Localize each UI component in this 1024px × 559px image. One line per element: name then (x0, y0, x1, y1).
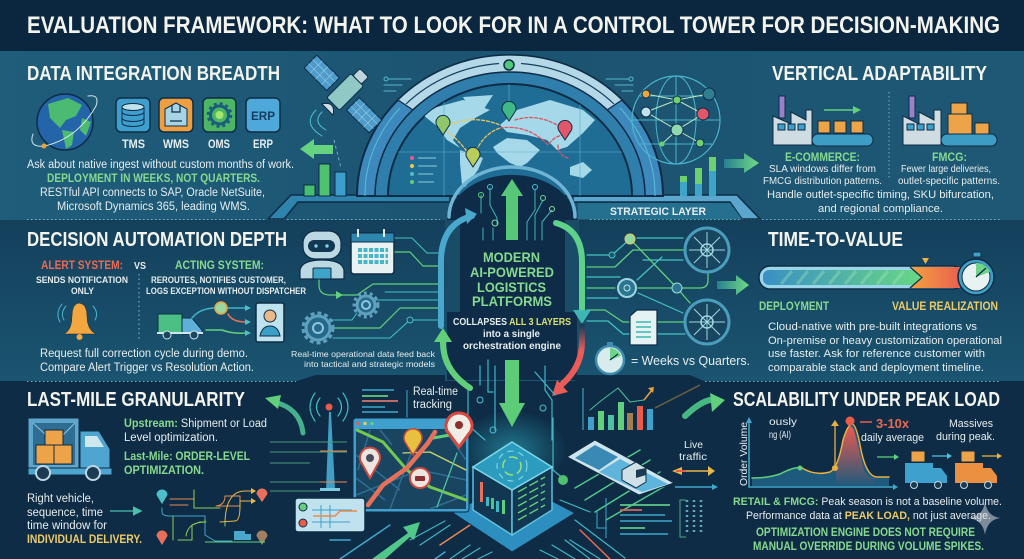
icon: network globe (606, 76, 720, 164)
strategic layer label: STRATEGIC LAYER (610, 206, 706, 218)
dome ring (357, 55, 663, 196)
peak label: daily average (861, 432, 924, 444)
heading: LAST-MILE GRANULARITY (27, 389, 246, 411)
dome top node (504, 60, 514, 70)
feedback note: Real-time operational data feed back (291, 349, 436, 359)
individual delivery text (27, 493, 142, 546)
body text: On-premise or heavy customization operational (768, 335, 1002, 347)
e-commerce text: SLA windows differ from (769, 164, 876, 175)
alert vs acting labels (41, 258, 264, 272)
alert vs acting labels: ACTING SYSTEM: (175, 258, 264, 272)
circuit lines left (319, 238, 438, 338)
individual delivery text: time window for (27, 520, 107, 532)
panel: data integration breadth (27, 63, 294, 213)
retail text: Performance data at PEAK LOAD, not just average. (746, 510, 991, 522)
icon: ERP: ERP (251, 109, 275, 123)
clipped annotation: ously (769, 416, 798, 428)
cube top face (473, 442, 552, 490)
central dome: strategic layer (268, 55, 760, 219)
arrow: green feedback up (434, 328, 470, 388)
FMCG text: Fewer large deliveries, (901, 164, 991, 175)
e-commerce text: E-COMMERCE: (785, 152, 860, 164)
map pins (360, 413, 472, 488)
icon: delivery truck and routes (157, 302, 251, 339)
live traffic label: traffic (679, 451, 707, 463)
map pins (436, 115, 450, 135)
capsule heading: PLATFORMS (472, 293, 552, 309)
body text: Ask about native ingest without custom months of work. (27, 159, 294, 171)
dome legend (410, 156, 414, 160)
feedback note (291, 349, 436, 369)
body text: use faster. Ask for reference customer with (768, 348, 985, 360)
bar chart: right dome (680, 157, 716, 196)
FMCG text: FMCG: (932, 152, 967, 164)
body text: Request full correction cycle during demo. (40, 348, 248, 360)
last-mile text: OPTIMIZATION. (124, 465, 204, 477)
heading: DATA INTEGRATION BREADTH (27, 63, 280, 85)
icon: document (630, 310, 657, 345)
y axis label: Order Volume (738, 422, 750, 486)
icon: calendar (351, 229, 394, 274)
FMCG text: outlet-specific patterns. (898, 176, 1000, 187)
acting description: LOGS EXCEPTION WITHOUT DISPATCHER (146, 286, 306, 297)
icon: wheel top (685, 228, 729, 272)
arrow: red down (552, 326, 582, 396)
acting description (146, 275, 306, 297)
legend lines (362, 390, 407, 420)
clipped annotation (769, 416, 798, 441)
real-time tracking label (413, 386, 458, 411)
alert vs acting labels: ALERT SYSTEM: (41, 258, 123, 272)
icon: robot (300, 231, 344, 279)
FMCG text (898, 152, 1000, 187)
glow (457, 410, 567, 490)
panel: last-mile granularity (27, 389, 268, 546)
cube charts (480, 482, 483, 502)
body text: Cloud-native with pre-built integrations vs (768, 321, 978, 333)
massives label: Massives (949, 418, 993, 430)
capsule note: into a single (483, 328, 540, 340)
weeks vs quarters: = Weeks vs Quarters. (631, 353, 750, 368)
icon: stopwatch small (596, 342, 624, 374)
icon: sparkle (969, 502, 1000, 535)
body text: Handle outlet-specific timing, SKU bifurcation, (767, 189, 994, 201)
arrow (110, 507, 141, 515)
body text (767, 189, 994, 215)
icon: FMCG factory (903, 96, 997, 146)
clipped annotation: ng (AI) (769, 429, 791, 441)
icon: ERP (246, 98, 280, 132)
panel: decision automation depth (27, 229, 438, 374)
body text (40, 348, 254, 374)
live traffic label (679, 439, 707, 463)
capsule note (453, 316, 571, 352)
e-commerce text (763, 152, 882, 187)
circuit traces (410, 360, 625, 559)
arrow: up (501, 179, 523, 240)
capsule heading: AI-POWERED (470, 264, 554, 280)
alert description: ONLY (71, 286, 95, 297)
capsule note: COLLAPSES ALL 3 LAYERS (453, 316, 571, 328)
map window (353, 413, 472, 512)
optimization callout: MANUAL OVERRIDE DURING VOLUME SPIKES. (753, 541, 984, 553)
arrow: live traffic (672, 466, 718, 490)
system labels: WMS (163, 139, 189, 151)
body text: and regional compliance. (818, 203, 943, 215)
arrow: down (499, 360, 525, 427)
arrow: green down right (556, 223, 591, 324)
optimization callout (753, 527, 984, 553)
central lower: orchestration engine (410, 360, 672, 559)
arrow: right to vertical adaptability (724, 153, 759, 173)
line chart (746, 416, 898, 490)
alert description (36, 275, 128, 297)
platform (268, 195, 450, 219)
body text: RESTful API connects to SAP, Oracle NetSuite, (40, 187, 265, 199)
capsule heading (470, 249, 554, 309)
body text: Compare Alert Trigger vs Resolution Action. (40, 362, 254, 374)
real-time tracking label: Real-time (413, 386, 458, 398)
body text (768, 321, 1002, 374)
icon: stopwatch (958, 252, 994, 295)
icon: scale trucks (877, 451, 1002, 488)
heading: TIME-TO-VALUE (768, 229, 903, 251)
peak label (860, 416, 924, 444)
central capsule (445, 167, 579, 380)
body text: DEPLOYMENT IN WEEKS, NOT QUARTERS. (47, 173, 260, 185)
peak label: 3-10x (876, 416, 910, 431)
retail text: RETAIL & FMCG: Peak season is not a baseline volume. (733, 496, 1002, 508)
last-mile text (124, 451, 250, 477)
icon: e-commerce factory (773, 96, 873, 146)
system labels: OMS (208, 139, 230, 151)
cube right face (512, 467, 552, 535)
massives label: during peak. (936, 431, 995, 443)
bar chart: analytics (583, 385, 700, 430)
system labels (122, 139, 273, 151)
data list (597, 498, 701, 538)
massives label (936, 418, 995, 443)
routing card (295, 498, 365, 532)
phase labels: DEPLOYMENT (759, 301, 829, 313)
icon: loaded truck (28, 418, 112, 480)
system labels: TMS (122, 139, 145, 151)
e-commerce text: FMCG distribution patterns. (763, 176, 882, 187)
column divider (888, 92, 890, 180)
body text: Microsoft Dynamics 365, leading WMS. (57, 201, 250, 213)
arrow: right to time-to-value (717, 275, 749, 295)
optimization callout: OPTIMIZATION ENGINE DOES NOT REQUIRE (756, 527, 975, 539)
arrow: green to scalability (685, 393, 725, 416)
icon: satellite (295, 40, 411, 142)
body text: comparable stack and deployment timeline. (768, 362, 984, 374)
capsule heading: LOGISTICS (477, 279, 546, 295)
upstream text (124, 418, 267, 444)
individual delivery text: INDIVIDUAL DELIVERY. (27, 534, 142, 546)
panel: scalability under peak load (733, 389, 1002, 553)
arrow: left to data integration (300, 139, 333, 159)
feedback note: into tactical and strategic models (304, 359, 435, 369)
icon: network nodes (609, 234, 682, 297)
icon: TMS (116, 98, 150, 132)
icon: OMS (203, 98, 236, 132)
capsule note: orchestration engine (463, 340, 561, 352)
icon: person card (256, 303, 284, 342)
system labels: ERP (253, 139, 273, 151)
upstream text: Level optimization. (124, 432, 218, 444)
body text (27, 159, 294, 213)
icon: wheel bottom (685, 300, 729, 344)
acting description: REROUTES, NOTIFIES CUSTOMER, (151, 275, 286, 286)
progress bar (759, 258, 964, 289)
circuit lines right (587, 238, 708, 334)
upstream text: Upstream: Shipment or Load (124, 418, 267, 430)
retail text (733, 496, 1002, 522)
icon: gears (303, 293, 378, 343)
icon: WMS (159, 98, 193, 132)
arrow: blue feedback up (441, 208, 477, 326)
arrow: curved green to last-mile (265, 395, 303, 433)
cube left face (473, 467, 512, 535)
route diagram (156, 488, 268, 546)
panel: time-to-value (759, 229, 1002, 374)
heading: VERTICAL ADAPTABILITY (772, 63, 988, 85)
individual delivery text: Right vehicle, (27, 493, 94, 505)
last-mile text: Last-Mile: ORDER-LEVEL (124, 451, 250, 463)
map routes (443, 120, 500, 160)
heading: DECISION AUTOMATION DEPTH (27, 229, 287, 251)
panel: vertical adaptability (763, 63, 1000, 215)
alert vs acting labels: VS (134, 260, 146, 272)
real-time tracking label: tracking (413, 399, 452, 411)
circuit traces in capsule (481, 188, 552, 240)
alert description: SENDS NOTIFICATION (36, 275, 128, 286)
icon: signal tower (270, 393, 348, 491)
icon: tablet with van (567, 440, 674, 495)
live traffic label: Live (684, 439, 703, 451)
icon: bell (58, 303, 97, 340)
bar chart: left dome (304, 140, 346, 196)
world map (388, 82, 632, 196)
icon: globe (32, 94, 97, 150)
cube base (453, 480, 575, 552)
phase labels: VALUE REALIZATION (892, 301, 998, 313)
individual delivery text: sequence, time (27, 507, 103, 519)
phase labels (759, 301, 998, 313)
arrows: lower left data streams (330, 522, 445, 559)
capsule heading: MODERN (483, 249, 540, 265)
